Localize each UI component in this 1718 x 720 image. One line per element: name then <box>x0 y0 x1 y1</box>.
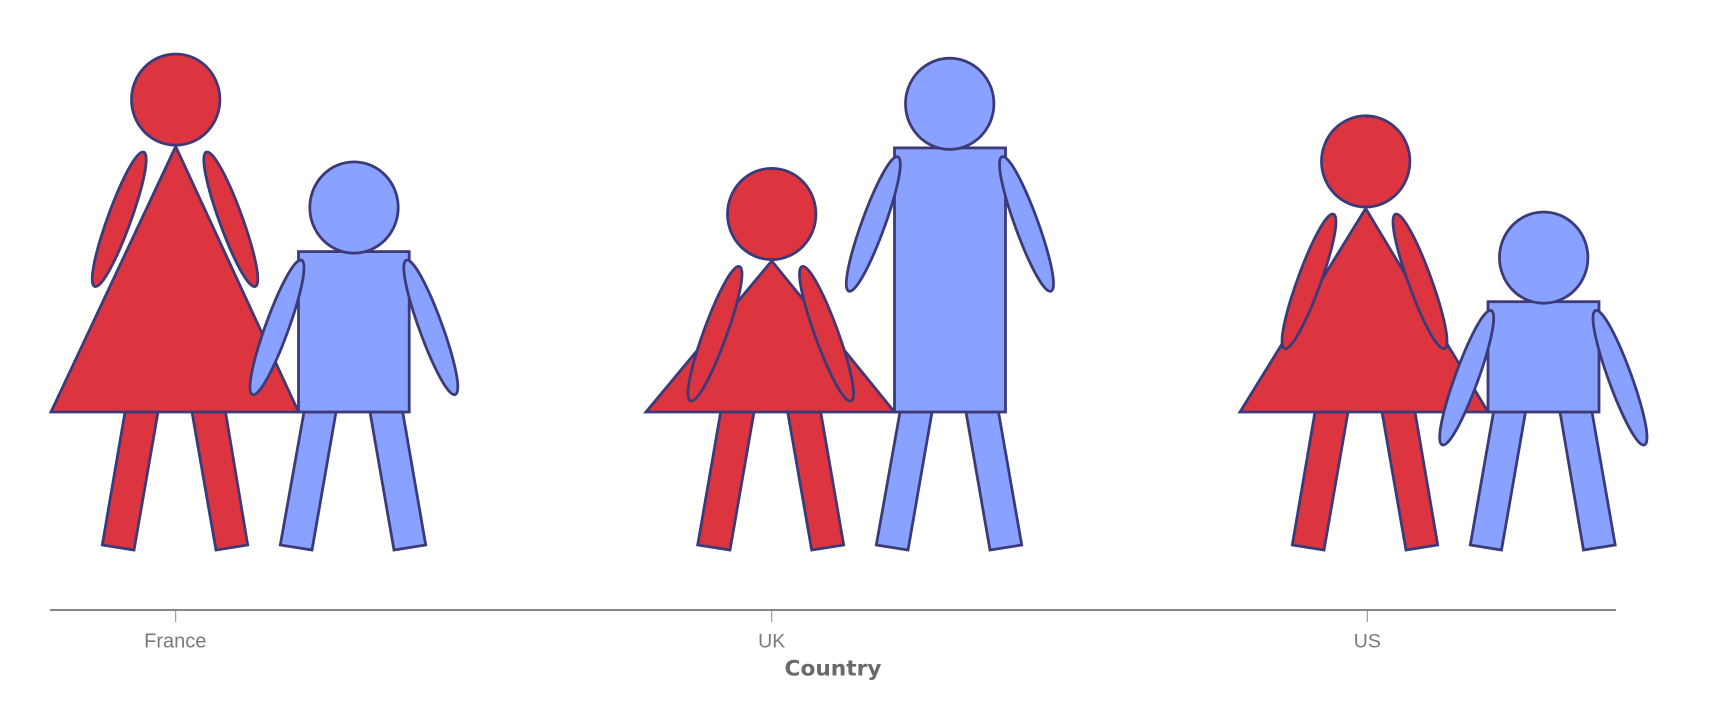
US woman figure <box>1240 116 1488 550</box>
UK man figure <box>838 58 1062 550</box>
France man figure <box>242 162 466 550</box>
axis label: US: US <box>1354 630 1381 652</box>
x axis with ticks <box>50 610 1616 622</box>
axis title: Country: Country <box>785 656 881 682</box>
axis label: UK: UK <box>758 630 785 652</box>
US man figure <box>1431 212 1655 550</box>
France woman figure <box>51 54 298 550</box>
axis label: France: France <box>144 630 206 652</box>
UK woman figure <box>646 168 894 550</box>
